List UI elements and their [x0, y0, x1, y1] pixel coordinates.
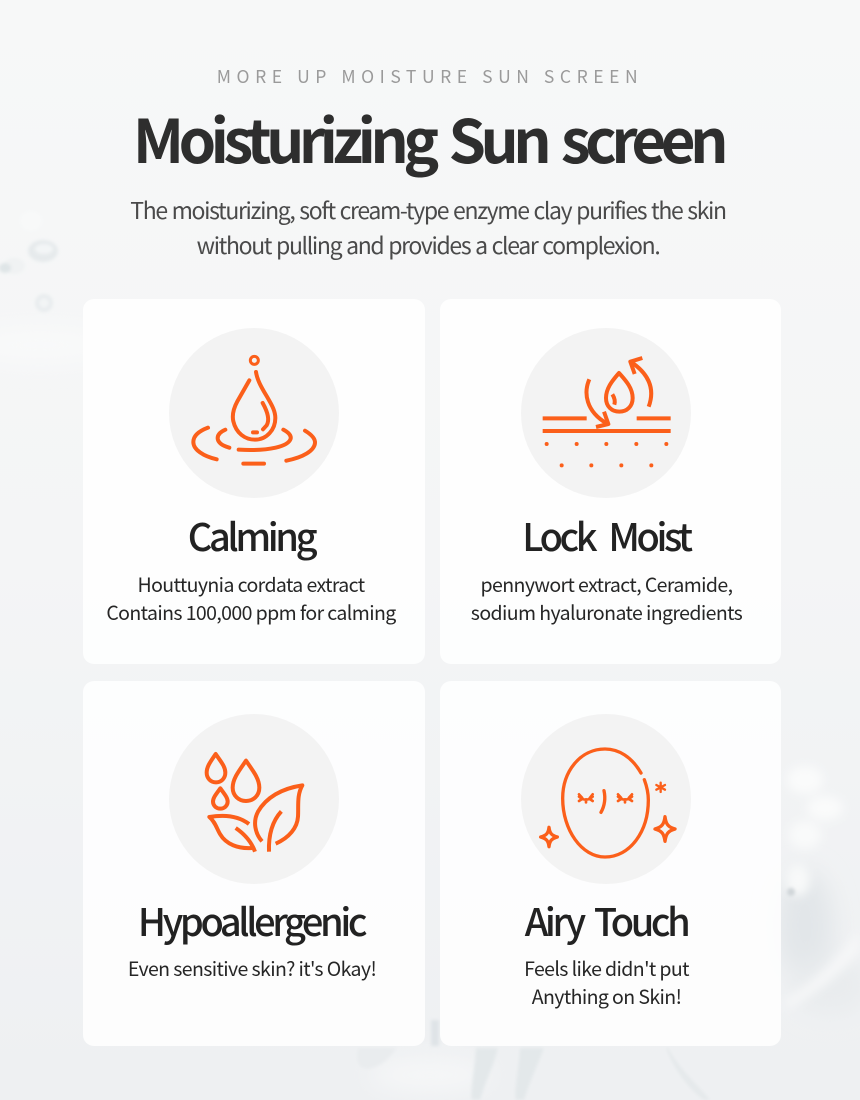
- title: Moisturizing Sun screen: [133, 94, 723, 181]
- description: sodium hyaluronate ingredients: [471, 597, 742, 626]
- panel: Hypoallergenic: [83, 681, 425, 1046]
- subtitle: The moisturizing, soft cream-type enzyme clay purifies the skin: [130, 192, 726, 226]
- icon: face with closed eyes and sparkles: [539, 747, 677, 859]
- icon background circle: [169, 714, 339, 884]
- panel: Calming: [83, 299, 425, 664]
- panel: Airy Touch: [440, 681, 781, 1046]
- icon: drops and leaves: [204, 752, 304, 852]
- heading: Hypoallergenic: [138, 892, 364, 947]
- description: [106, 569, 396, 626]
- description: [471, 569, 742, 626]
- icon: water drop with ripples: [191, 354, 317, 466]
- panel: Lock Moist: [440, 299, 781, 664]
- eyebrow label: MORE UP MOISTURE SUN SCREEN: [217, 64, 643, 89]
- icon background circle: [169, 328, 339, 498]
- description: Even sensitive skin? it's Okay!: [128, 953, 376, 982]
- description: [524, 953, 690, 1010]
- description: Contains 100,000 ppm for calming: [106, 597, 396, 626]
- subtitle: [130, 192, 726, 261]
- heading: Lock Moist: [522, 507, 690, 562]
- icon background circle: [521, 328, 691, 498]
- heading: Airy Touch: [525, 892, 687, 947]
- icon: skin layers with drop and arrows: [542, 356, 671, 468]
- description: Anything on Skin!: [532, 981, 681, 1010]
- icon background circle: [521, 714, 691, 884]
- droplets: [28, 240, 58, 262]
- description: Feels like didn't put: [524, 953, 689, 982]
- subtitle: without pulling and provides a clear complexion.: [197, 227, 659, 261]
- description: Houttuynia cordata extract: [137, 569, 365, 598]
- heading: Calming: [188, 507, 314, 562]
- description: pennywort extract, Ceramide,: [481, 569, 732, 598]
